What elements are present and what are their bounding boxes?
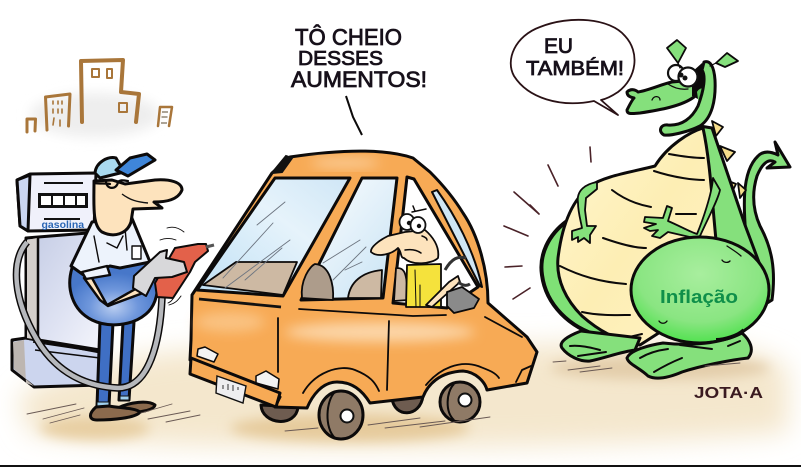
hose	[16, 242, 162, 388]
bumper	[190, 358, 280, 407]
headlights	[197, 347, 218, 362]
front wheel	[319, 391, 363, 439]
motion lines around dragon	[504, 147, 591, 299]
belly sphere	[631, 237, 769, 343]
buildings	[27, 60, 172, 137]
cap	[95, 158, 124, 178]
speech text: driver	[291, 23, 427, 135]
attendant	[16, 154, 214, 423]
glove	[133, 250, 187, 296]
head	[94, 180, 182, 235]
body highlights	[195, 312, 265, 332]
nozzle	[155, 244, 208, 298]
dragon	[541, 40, 790, 378]
green crescent of back	[541, 221, 640, 340]
glasses	[94, 180, 128, 188]
scuff marks	[553, 361, 740, 372]
motion marks at nozzle	[160, 227, 184, 305]
spines	[712, 121, 746, 198]
speech balloon: dragon	[511, 20, 635, 115]
sphere label: Inflação	[660, 287, 738, 307]
car	[190, 151, 537, 439]
pump column	[26, 232, 100, 350]
near shoe	[90, 406, 140, 420]
door lines	[278, 309, 522, 390]
windshield	[197, 178, 350, 296]
pump label: gasolina	[42, 219, 84, 231]
belly lines	[560, 154, 704, 341]
lower jaw	[661, 62, 715, 135]
side window	[301, 178, 397, 300]
dragon head	[627, 80, 694, 114]
left arm	[572, 182, 597, 243]
signature: JOTA·A	[694, 385, 764, 402]
far wheels	[261, 405, 298, 421]
legs	[97, 322, 113, 406]
ground shadow	[18, 340, 788, 448]
pump head	[17, 173, 96, 231]
wheel arches	[303, 364, 531, 393]
pump base	[12, 338, 100, 387]
pump display	[38, 193, 88, 208]
scuff marks	[27, 404, 200, 423]
speech text: driver: TÔ CHEIO	[295, 23, 402, 50]
license plate	[216, 376, 246, 403]
bottom border	[0, 465, 801, 467]
yellow belly	[558, 128, 716, 345]
mouth	[692, 63, 708, 100]
shirt	[71, 216, 150, 276]
speech balloon: dragon: EU	[544, 35, 573, 58]
ears	[667, 40, 686, 63]
speech text: driver: DESSES	[298, 48, 383, 70]
tail	[740, 142, 790, 320]
neck and back	[700, 126, 768, 300]
speech text: driver: AUMENTOS!	[291, 67, 427, 92]
speech balloon: dragon: TAMBÉM!	[526, 57, 624, 80]
belly trousers	[70, 262, 158, 325]
driver	[371, 206, 460, 307]
far foot	[561, 331, 640, 361]
steering wheel and dash	[445, 257, 470, 285]
rear wheel	[440, 382, 480, 422]
forearm	[84, 278, 143, 306]
car body	[190, 151, 537, 408]
eyes	[668, 65, 684, 81]
far shoe	[118, 402, 155, 413]
door window	[393, 177, 478, 308]
near foot	[627, 333, 751, 378]
right arm	[644, 178, 720, 238]
roof spoiler	[272, 156, 292, 173]
gas pump	[12, 173, 100, 387]
